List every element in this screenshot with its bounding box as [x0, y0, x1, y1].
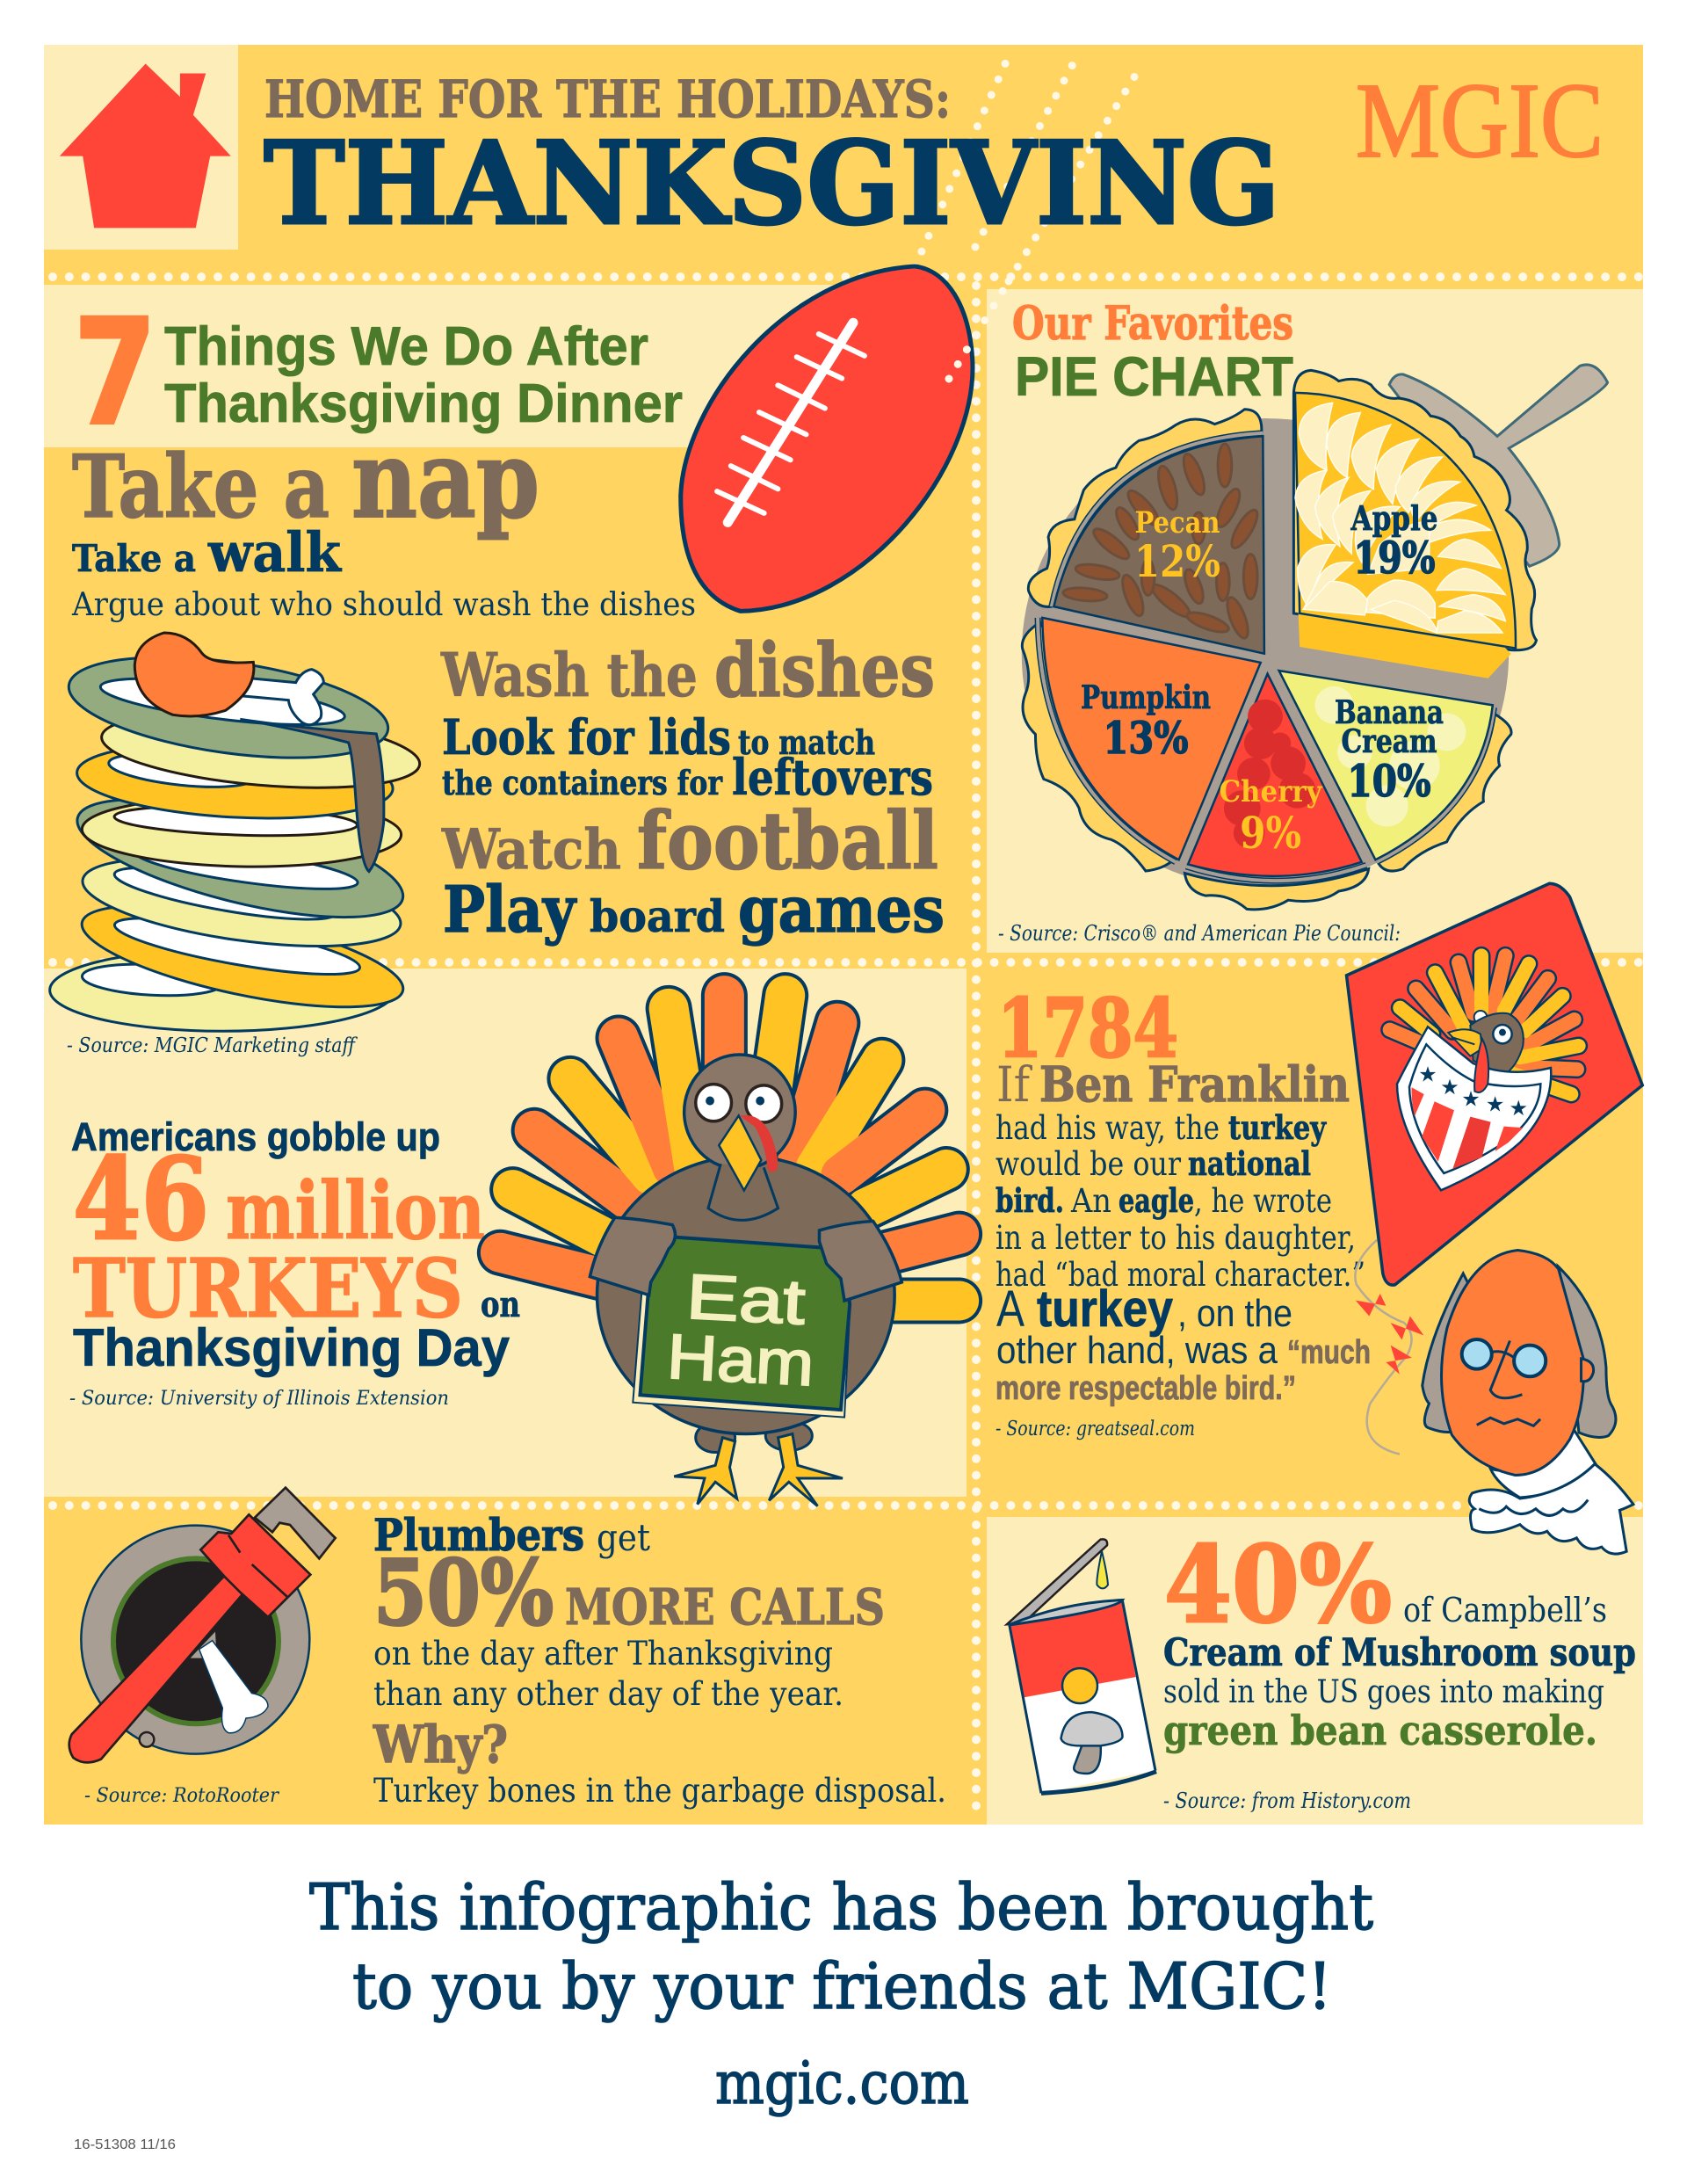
pie labels: Cherry [1220, 774, 1323, 809]
text block: turkey statistic: 46 [73, 1134, 209, 1266]
tail feathers [500, 996, 959, 1301]
pie labels [1081, 498, 1444, 859]
hair back [1423, 1273, 1474, 1433]
print code: 16-51308 11/16 [74, 2137, 176, 2152]
text block: after dinner list: leftovers [732, 749, 933, 807]
text block: plumbers: 50% [373, 1541, 554, 1646]
illustration: soup can [1007, 1539, 1156, 1793]
pie pan and server [1022, 365, 1608, 889]
heading: our favorites pie chart: PIE CHART [1015, 346, 1293, 408]
slice: pumpkin [1022, 618, 1261, 871]
heading text: Things We Do After [164, 316, 648, 377]
title [264, 69, 1280, 250]
footer: credit: This infographic has been brought [309, 1870, 1373, 1944]
shield stars: ★ [1440, 1075, 1459, 1099]
can lid [1007, 1539, 1107, 1624]
sign text: Eat Ham: Ham [665, 1322, 815, 1399]
text block: Ben Franklin: An [1070, 1182, 1111, 1220]
mushroom [1074, 1743, 1101, 1774]
text block: Ben Franklin: bird. [996, 1181, 1064, 1220]
heading: 7 things [74, 288, 683, 457]
gravy drip [240, 719, 384, 872]
illustration: stack of dirty plates [50, 633, 423, 1031]
pie labels: Pumpkin [1081, 679, 1211, 716]
big numeral 7: 7 [74, 288, 156, 457]
text block: after dinner list: Watch [441, 816, 621, 882]
kite turkey head [1474, 1011, 1487, 1024]
wrench head [200, 1514, 310, 1617]
eyes [696, 1085, 732, 1121]
kite turkey beak [1448, 1029, 1482, 1056]
text block: Ben Franklin: would be our [996, 1145, 1181, 1183]
text block: Ben Franklin: “much [1287, 1334, 1371, 1371]
pie labels: 9% [1240, 807, 1301, 859]
text block: cream of mushroom [1163, 1523, 1636, 1813]
pie labels: Apple [1350, 498, 1437, 538]
turkey leg [134, 633, 254, 716]
kite turkey emblem [1390, 955, 1579, 1190]
text block: plumbers [373, 1509, 946, 1810]
can label dot [1062, 1668, 1097, 1703]
pie labels: 13% [1104, 712, 1188, 764]
left foot [674, 1438, 737, 1505]
text block: after dinner list: the containers for [442, 763, 723, 802]
text block: turkey statistic: million [226, 1165, 485, 1258]
shield stripes [1412, 1087, 1523, 1162]
text block: turkey statistic: Thanksgiving Day [73, 1318, 510, 1377]
text block: Ben Franklin: national [1188, 1144, 1311, 1183]
title kicker: HOME FOR THE HOLIDAYS: [264, 69, 951, 129]
source note: Franklin: - Source: greatseal.com [996, 1418, 1195, 1440]
text block: after dinner list: Argue about who should wash the dishes [71, 587, 696, 623]
slice: banana cream [1279, 671, 1511, 871]
pie labels: 10% [1348, 755, 1430, 807]
jabot ruffle [1469, 1464, 1633, 1554]
footer: credit [309, 1870, 1373, 2117]
shield [1397, 1027, 1551, 1190]
face [1442, 1250, 1583, 1475]
pie labels: Pecan [1135, 505, 1220, 541]
apple slices [1295, 403, 1505, 633]
text block: Ben Franklin: eagle [1119, 1181, 1194, 1220]
text block: after dinner list: games [738, 872, 945, 947]
text block: plumbers: than any other day of the year. [373, 1675, 844, 1713]
illustration: turkey holding sign [500, 996, 959, 1506]
slice: pecan [1028, 410, 1264, 654]
text block: after dinner list: football [637, 795, 938, 888]
bone [240, 670, 323, 725]
chart: pie slices [1022, 365, 1608, 910]
kite string and bows [1355, 1240, 1423, 1455]
wrench handle [69, 1576, 243, 1762]
slice: cherry [1184, 674, 1369, 910]
kite body [1346, 883, 1642, 1285]
heading: our favorites pie chart: Our Favorites [1012, 297, 1293, 351]
collar [1490, 1431, 1597, 1498]
source note: history: - Source: from History.com [1163, 1789, 1411, 1813]
shield stars [1418, 1063, 1528, 1121]
text block: Ben Franklin [996, 981, 1371, 1440]
shield stars: ★ [1461, 1086, 1481, 1111]
text block: turkey statistic: Americans gobble up [71, 1114, 440, 1159]
text block: plumbers: on the day after Thanksgiving [373, 1635, 833, 1672]
icon: red house [60, 64, 231, 228]
sign text: Eat Ham [665, 1262, 815, 1399]
beak [719, 1115, 761, 1190]
text block: after dinner list: Take a [72, 537, 196, 580]
text block: after dinner list: board [590, 890, 725, 942]
text block: after dinner list: Take a [72, 437, 329, 538]
text block: Ben Franklin: turkey [1037, 1281, 1173, 1338]
drain [81, 1526, 309, 1754]
chalkboard sign [633, 1245, 851, 1418]
kite turkey wattle [1474, 1039, 1488, 1092]
illustration: clogged drain and wrench [69, 1488, 336, 1762]
pie labels: Cream [1341, 723, 1437, 760]
can body [1010, 1601, 1155, 1793]
pie labels: Banana [1335, 694, 1444, 731]
text block: turkey statistic: TURKEYS [73, 1241, 463, 1336]
left wing hand [590, 1217, 675, 1295]
text block: Ben Franklin: turkey [1228, 1108, 1327, 1147]
text block: Ben Franklin: 1784 [997, 981, 1178, 1076]
text block: turkey statistic: on [481, 1284, 520, 1325]
icon: football [681, 266, 973, 611]
text block: Ben Franklin: A [996, 1281, 1025, 1338]
text block: Ben Franklin: If [996, 1056, 1032, 1113]
text block: plumbers: get [597, 1516, 650, 1559]
glasses [1462, 1339, 1492, 1369]
illustration: turkey kite [1346, 883, 1642, 1455]
turkey head [684, 1055, 795, 1169]
source note: RotoRooter: - Source: RotoRooter [84, 1785, 279, 1807]
source note: plates: - Source: MGIC Marketing staff [67, 1034, 358, 1057]
wattle [740, 1115, 778, 1172]
nose and mouth [1477, 1341, 1540, 1426]
text block: after dinner list: walk [207, 520, 343, 584]
illustration: Ben Franklin head [1423, 1250, 1633, 1554]
shield stars: ★ [1418, 1063, 1437, 1087]
sign text: Eat Ham: Eat [684, 1262, 807, 1339]
drip [1097, 1551, 1108, 1588]
text block: Ben Franklin: had his way, the [996, 1109, 1220, 1147]
text block: Ben Franklin: , he wrote [1194, 1182, 1332, 1220]
text block: after dinner list: Look for lids [442, 708, 731, 765]
shield stars: ★ [1510, 1096, 1528, 1121]
right wing hand [819, 1221, 901, 1301]
text block: after dinner list: Play [443, 872, 577, 947]
text block: cream of mushroom: green bean casserole. [1163, 1707, 1597, 1754]
pie labels: 12% [1134, 535, 1220, 587]
text block: after dinner list: to match [738, 722, 875, 762]
pie labels: 19% [1353, 532, 1436, 584]
text block: after dinner list: Wash the [440, 641, 698, 711]
text block: cream of mushroom: of Campbell’s [1403, 1591, 1607, 1629]
text block: Ben Franklin: , on the [1177, 1292, 1292, 1335]
text block: Ben Franklin: Ben Franklin [1039, 1056, 1350, 1113]
text block: Ben Franklin: had “bad moral character.” [996, 1256, 1365, 1294]
main title: THANKSGIVING [264, 116, 1280, 250]
turkey body [597, 1157, 894, 1434]
legs bumps [696, 1423, 735, 1453]
source note: pie: - Source: Crisco® and American Pie Council: [998, 921, 1401, 946]
text block: plumbers: Turkey bones in the garbage disposal. [373, 1772, 946, 1810]
kite turkey feathers [1390, 955, 1579, 1094]
text block: after dinner list: nap [351, 416, 539, 542]
slice: apple crust and filling [1293, 370, 1537, 678]
text block: Ben Franklin: other hand, was a [996, 1329, 1278, 1372]
panel: yellow infographic background [44, 45, 1643, 1825]
bone [199, 1641, 268, 1733]
text block: cream of mushroom: sold in the US goes into making [1163, 1674, 1604, 1710]
footer: credit: to you by your friends at MGIC! [352, 1949, 1332, 2023]
source note: turkeys: - Source: University of Illinois Extension [69, 1388, 449, 1410]
text block: plumbers: MORE CALLS [565, 1578, 885, 1636]
text block: Ben Franklin: in a letter to his daughter, [996, 1219, 1356, 1257]
text block: turkey statistic [69, 1114, 520, 1410]
right foot [769, 1434, 843, 1506]
text block: plumbers: Why? [373, 1715, 508, 1774]
text block: cream of mushroom: 40% [1164, 1523, 1392, 1647]
shield stars: ★ [1486, 1092, 1504, 1116]
wrench jaw [255, 1488, 336, 1558]
ear [1582, 1359, 1594, 1382]
text block: after dinner list: dishes [714, 627, 935, 714]
footer: website: mgic.com [715, 2050, 969, 2117]
heading: 7 things: Thanksgiving Dinner [164, 374, 683, 434]
heading: our favorites pie chart [1012, 297, 1293, 408]
logo: MGIC: MGIC [1356, 62, 1604, 180]
text block: plumbers: Plumbers [373, 1509, 584, 1561]
text block: after dinner list [71, 416, 945, 947]
text block: Ben Franklin: more respectable bird.” [996, 1370, 1296, 1407]
